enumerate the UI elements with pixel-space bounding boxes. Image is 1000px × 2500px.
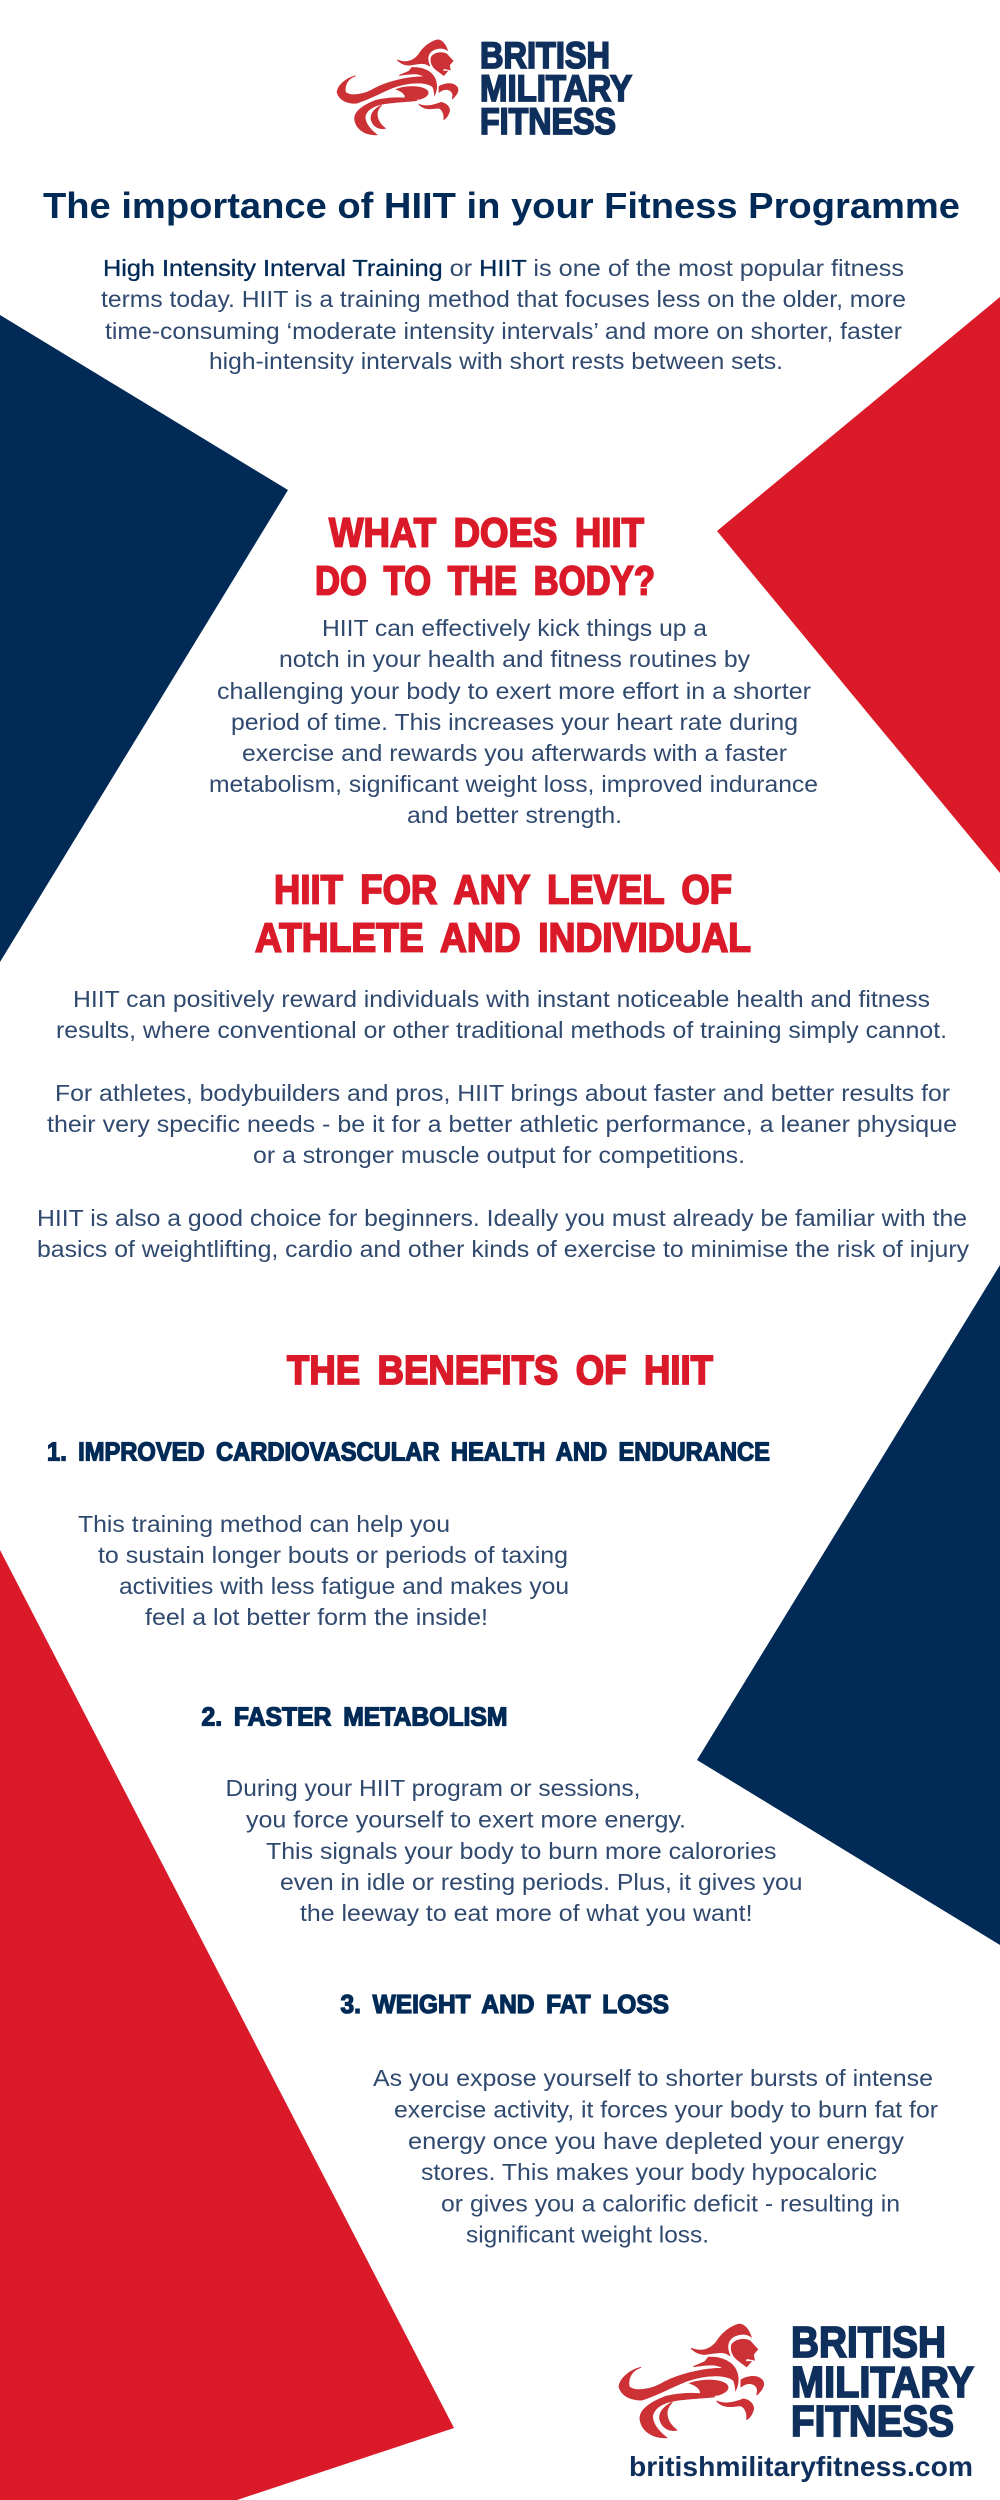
subheading: faster metabolism: 2. FASTER METABOLISM	[202, 1702, 508, 1732]
intro text block	[101, 255, 906, 374]
intro text block: terms today. HIIT is a training method that focuses less on the older, more	[101, 286, 906, 312]
section: what does HIIT do	[209, 510, 818, 828]
text: what does HIIT do: exercise and rewards you afterwards with a faster	[242, 740, 787, 766]
text: instant results: results, where conventional or other traditional methods of training simply cannot.	[56, 1017, 947, 1043]
icon: header lion	[337, 40, 458, 135]
text: benefit 2	[226, 1775, 802, 1926]
text: benefit 3: stores. This makes your body hypocaloric	[421, 2159, 877, 2185]
text: benefit 3: exercise activity, it forces your body to burn fat for	[394, 2096, 938, 2122]
footer wordmark: FITNESS	[791, 2398, 954, 2446]
header logo	[337, 34, 632, 142]
text: benefit 3: significant weight loss.	[466, 2222, 709, 2248]
text: athletes: For athletes, bodybuilders and pros, HIIT brings about faster and better results for	[55, 1080, 950, 1106]
text: benefit 3: energy once you have depleted your energy	[408, 2128, 905, 2154]
section: HIIT for any level	[37, 866, 970, 1262]
text: instant results	[56, 986, 947, 1043]
heading: what does HIIT do to the body: DO TO THE BODY?	[315, 558, 655, 604]
text: what does HIIT do: metabolism, significant weight loss, improved indurance	[209, 771, 818, 797]
benefit 2	[202, 1702, 802, 1926]
text: benefit 2: During your HIIT program or sessions,	[226, 1775, 640, 1801]
text: what does HIIT do: notch in your health and fitness routines by	[279, 646, 751, 672]
text: what does HIIT do: challenging your body to exert more effort in a shorter	[217, 678, 811, 704]
header wordmark: MILITARY	[480, 67, 632, 109]
footer wordmark: BRITISH	[791, 2319, 946, 2367]
text: benefit 1: feel a lot better form the inside!	[145, 1604, 488, 1630]
heading: HIIT for any level of athlete and individual: ATHLETE AND INDIVIDUAL	[255, 914, 751, 960]
red shape bottom left	[0, 1550, 454, 2500]
red triangle top right	[717, 297, 1000, 873]
text: what does HIIT do: and better strength.	[407, 802, 622, 828]
text: benefit 1: activities with less fatigue and makes you	[119, 1573, 569, 1599]
text: athletes	[47, 1080, 957, 1168]
text: what does HIIT do	[209, 615, 818, 828]
benefit 1	[47, 1436, 770, 1630]
heading: what does HIIT do to the body: WHAT DOES HIIT	[329, 510, 644, 556]
intro text block: high-intensity intervals with short rests between sets.	[209, 348, 783, 374]
text: benefit 1	[78, 1511, 569, 1630]
subheading: weight and fat loss: 3. WEIGHT AND FAT LOSS	[340, 1989, 669, 2019]
title: The importance of HIIT in your Fitness Programme	[43, 185, 960, 226]
header wordmark: FITNESS	[480, 100, 616, 142]
text: benefit 3: As you expose yourself to shorter bursts of intense	[373, 2065, 933, 2091]
text: athletes: or a stronger muscle output for competitions.	[253, 1142, 745, 1168]
subheading: improved cardiovascular health: 1. IMPROVED CARDIOVASCULAR HEALTH AND ENDURANCE	[47, 1436, 770, 1466]
text: athletes: their very specific needs - be it for a better athletic performance, a leaner physique	[47, 1111, 957, 1137]
text: benefit 3: or gives you a calorific deficit - resulting in	[441, 2190, 900, 2216]
intro text block: time-consuming ‘moderate intensity intervals’ and more on shorter, faster	[105, 318, 902, 344]
text: benefit 2: This signals your body to burn more calorories	[266, 1838, 776, 1864]
heading: what does HIIT do to the body	[315, 510, 655, 604]
heading: the benefits of HIIT: THE BENEFITS OF HIIT	[287, 1347, 713, 1393]
heading: HIIT for any level of athlete and individual	[255, 866, 751, 960]
heading: HIIT for any level of athlete and individual: HIIT FOR ANY LEVEL OF	[274, 866, 732, 912]
footer wordmark: MILITARY	[791, 2359, 974, 2407]
footer logo	[619, 2319, 974, 2482]
text: benefit 2: the leeway to eat more of what you want!	[300, 1900, 752, 1926]
text: beginners: HIIT is also a good choice for beginners. Ideally you must already be familiar with the	[37, 1205, 967, 1231]
website url: britishmilitaryfitness.com	[629, 2451, 973, 2482]
text: benefit 3	[373, 2065, 938, 2248]
text: beginners: basics of weightlifting, cardio and other kinds of exercise to minimise the risk of injury	[37, 1236, 970, 1262]
intro text block: High Intensity Interval Training or HIIT is one of the most popular fitness	[103, 255, 904, 281]
text: benefit 1: This training method can help you	[78, 1511, 450, 1537]
header wordmark: BRITISH	[480, 34, 610, 76]
navy triangle lower right	[697, 1265, 1000, 1945]
text: benefit 2: even in idle or resting periods. Plus, it gives you	[280, 1869, 802, 1895]
text: instant results: HIIT can positively reward individuals with instant noticeable health and fitness	[73, 986, 930, 1012]
benefit 3	[340, 1989, 938, 2248]
text: beginners	[37, 1205, 970, 1262]
navy triangle top left	[0, 315, 288, 962]
text: what does HIIT do: period of time. This increases your heart rate during	[231, 709, 798, 735]
text: benefit 2: you force yourself to exert more energy.	[246, 1806, 686, 1832]
text: benefit 1: to sustain longer bouts or periods of taxing	[98, 1542, 568, 1568]
header wordmark	[480, 34, 632, 142]
icon: footer lion	[619, 2324, 764, 2438]
footer wordmark	[791, 2319, 974, 2446]
text: what does HIIT do: HIIT can effectively kick things up a	[322, 615, 707, 641]
